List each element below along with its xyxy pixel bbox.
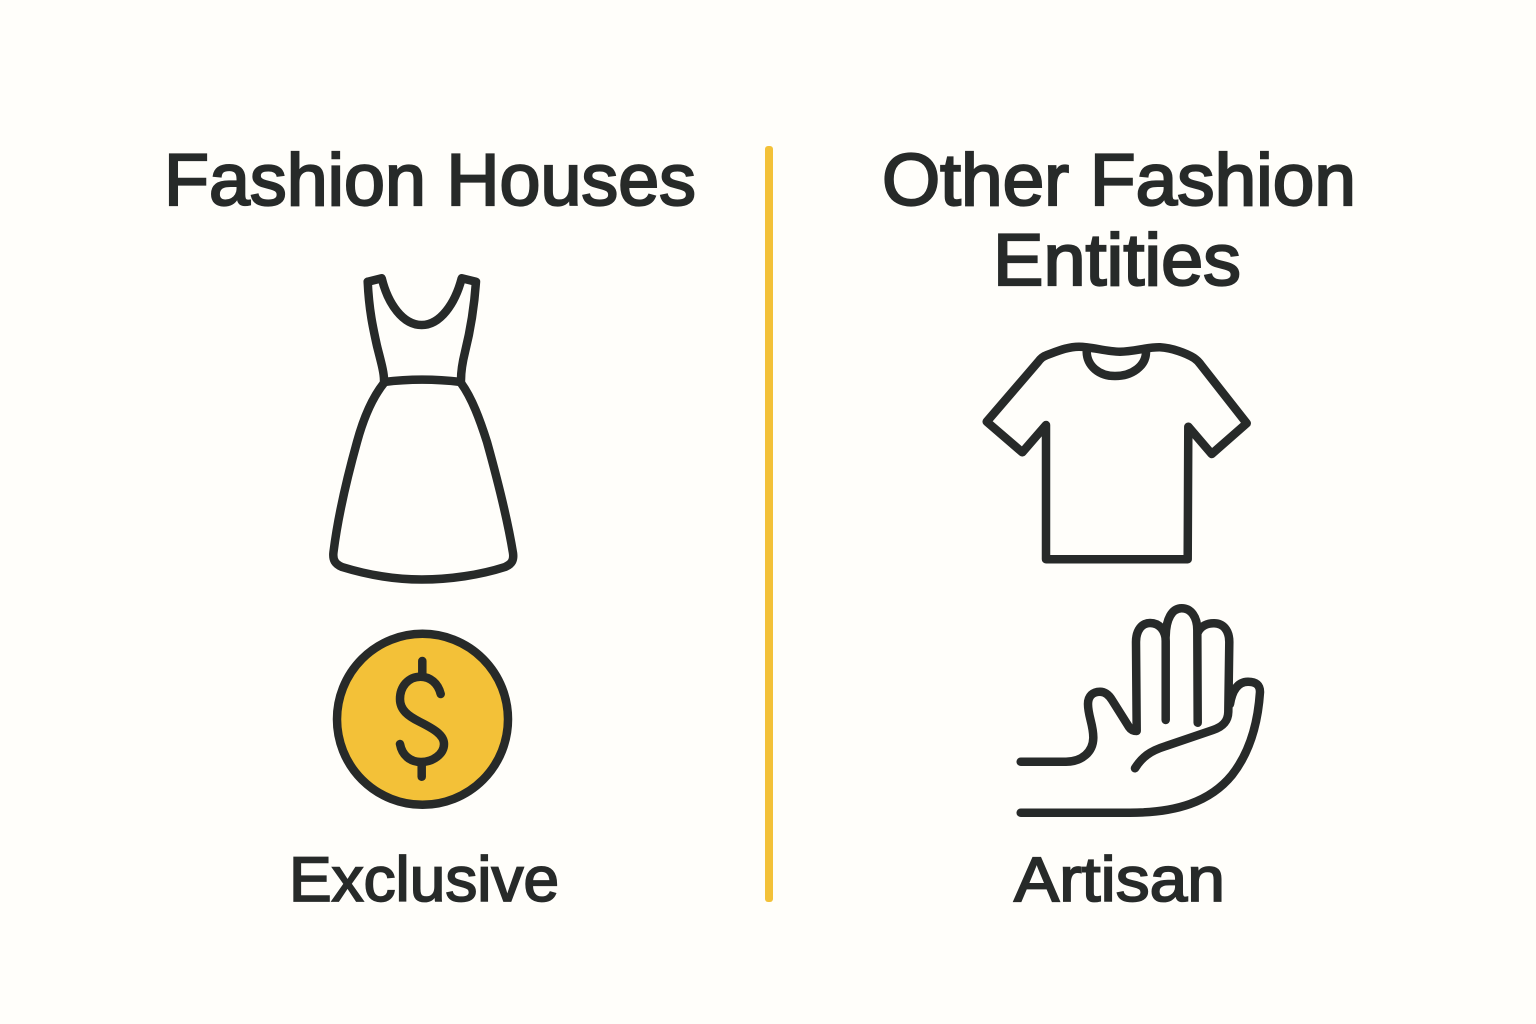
heading: Fashion Houses: Fashion Houses — [164, 140, 696, 221]
label: Artisan: Artisan — [1014, 845, 1225, 915]
label: Exclusive: Exclusive — [289, 845, 559, 915]
heading: Other Fashion Entities — [882, 140, 1356, 301]
icon: artisan hand — [1021, 608, 1260, 813]
panel: other fashion entities — [882, 140, 1356, 915]
icon: dollar coin — [337, 634, 508, 805]
heading: Other Fashion Entities: Entities — [993, 220, 1241, 301]
panel: fashion houses — [164, 140, 696, 915]
heading: Other Fashion Entities: Other Fashion — [882, 140, 1356, 221]
icon: dress — [333, 278, 513, 580]
icon: t-shirt — [987, 347, 1247, 559]
divider: vertical yellow line — [765, 146, 773, 902]
